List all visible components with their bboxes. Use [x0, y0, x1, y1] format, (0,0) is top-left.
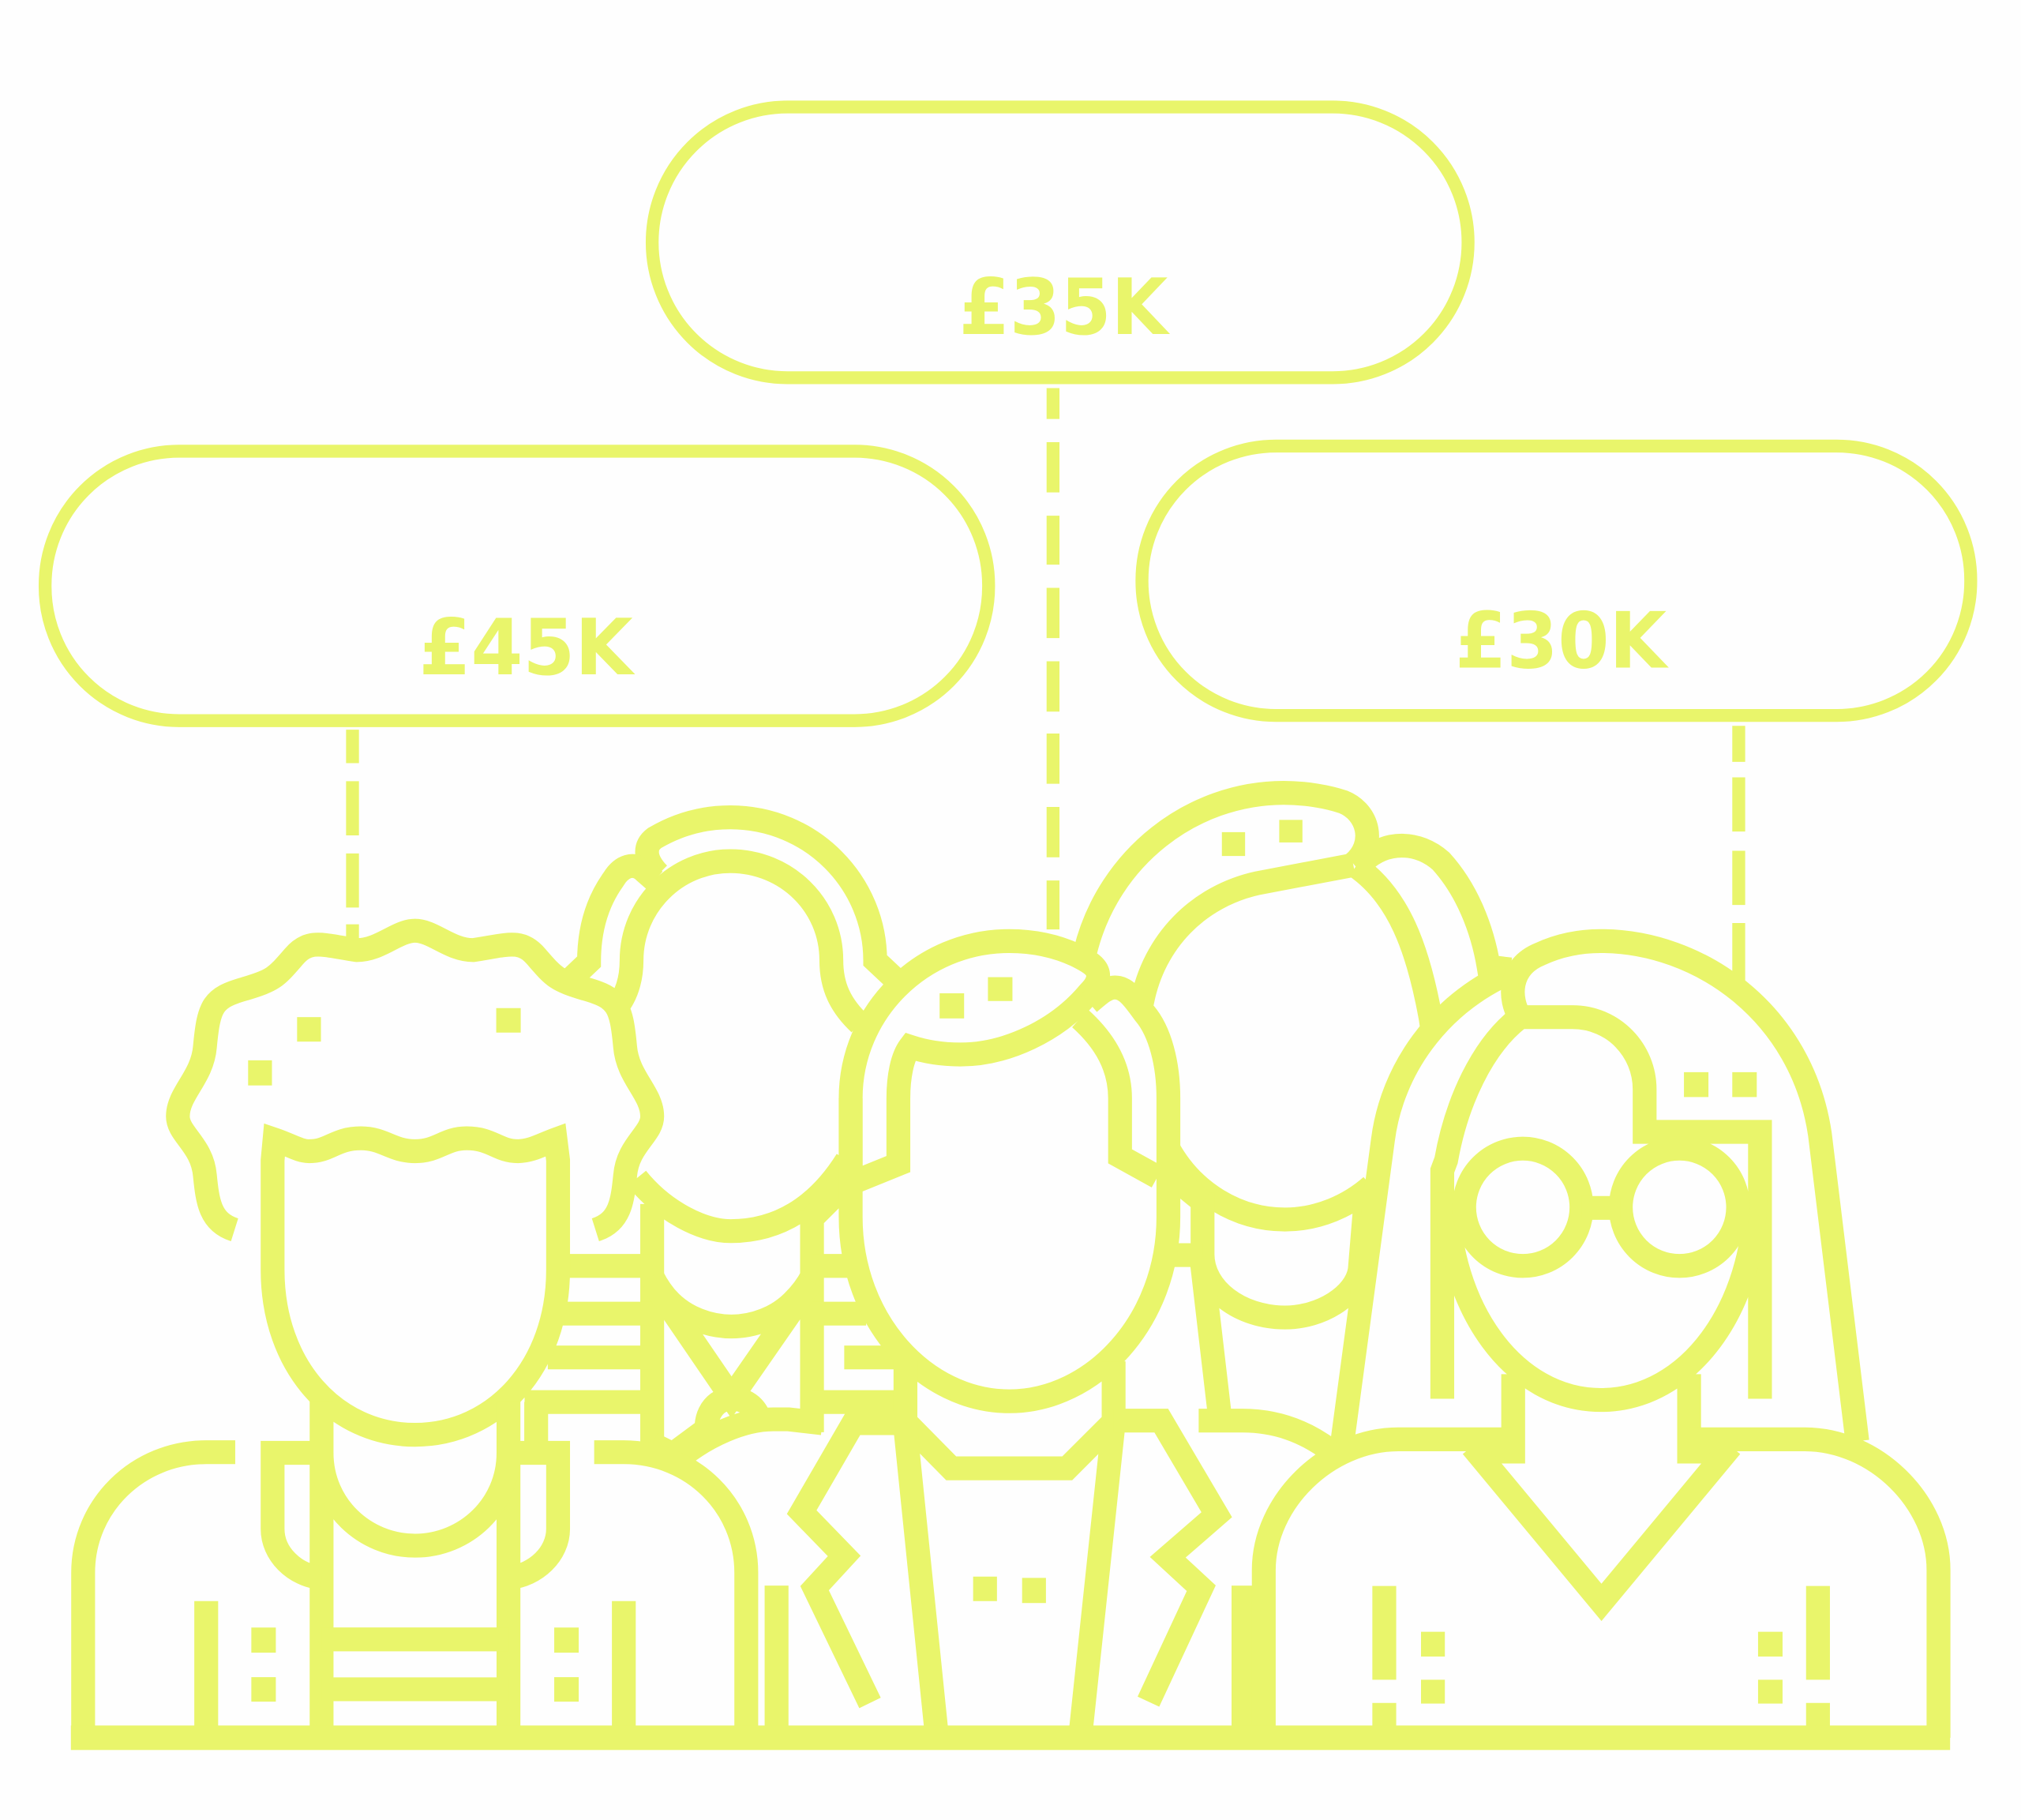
- person: woman at back left: [524, 817, 905, 1454]
- person: woman with glasses on right: [1264, 941, 1939, 1738]
- hair highlights: [1684, 1072, 1757, 1097]
- callout: £30K: [1142, 446, 1970, 715]
- person: man on left: [83, 931, 746, 1738]
- jacket buttons: [973, 1577, 1046, 1603]
- dashed connector: £30K: [1734, 726, 1742, 982]
- jacket buttons: [251, 1627, 579, 1702]
- hair highlights: [939, 978, 1012, 1019]
- icon: glasses: [1464, 1149, 1738, 1266]
- jumper buttons: [1421, 1632, 1783, 1704]
- hair highlights: [248, 1008, 521, 1086]
- callout: £45K: £45K: [419, 603, 636, 693]
- callout: £30K: £30K: [1455, 597, 1669, 687]
- person: man in centre: [777, 941, 1258, 1738]
- callout: £35K: £35K: [959, 263, 1170, 353]
- person: woman at back right: [1085, 793, 1510, 1450]
- dashed connector: £35K: [1049, 388, 1057, 929]
- dashed connector: £45K: [349, 730, 357, 948]
- callout: £35K: [652, 107, 1468, 377]
- callout: £45K: [45, 451, 988, 721]
- hair highlights: [1222, 820, 1303, 856]
- baseline: [71, 1725, 1950, 1750]
